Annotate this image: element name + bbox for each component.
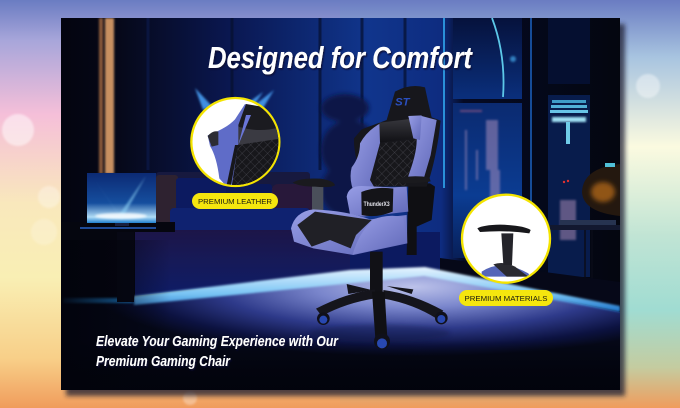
houseplant silhouette [322, 92, 372, 214]
desk and globe [550, 163, 620, 277]
arc light [492, 18, 504, 97]
callout: premium materials [459, 195, 553, 306]
neck pillow [379, 119, 412, 142]
poster drop shadow [66, 24, 625, 396]
right purple stripe [407, 116, 437, 180]
left armrest [293, 178, 335, 212]
title: Designed for Comfort [208, 40, 473, 75]
lumbar pillow [347, 186, 408, 217]
city windows [443, 18, 590, 277]
ceiling lamp [550, 100, 588, 144]
premium materials label: PREMIUM MATERIALS [464, 294, 548, 303]
vignette [140, 348, 620, 390]
desktop monitor [80, 173, 156, 229]
armrest detail circle [462, 195, 550, 283]
warm wooden light strips [98, 18, 116, 173]
right armrest [395, 176, 431, 183]
city lights [460, 110, 576, 240]
LED floor strip [64, 265, 620, 313]
wall panel lines [148, 18, 405, 170]
tagline line 2: Premium Gaming Chair [96, 354, 231, 370]
lumbar pillow: ThunderX3 [364, 201, 390, 208]
headrest logo: ST [395, 96, 411, 108]
chair base and casters [310, 252, 450, 349]
backrest [351, 86, 441, 195]
floor platform [135, 230, 350, 296]
gaming chair [291, 86, 450, 349]
callout: premium leather [191, 98, 282, 209]
tagline line 1: Elevate Your Gaming Experience with Our [96, 334, 339, 350]
back wall [61, 18, 620, 288]
quilted panel [375, 139, 416, 186]
left purple wing [350, 124, 380, 188]
leather detail circle [191, 98, 282, 187]
tagline [96, 334, 339, 370]
poster: gaming room scene [61, 18, 620, 390]
seat [291, 209, 407, 255]
right arm post [407, 183, 435, 255]
premium leather label: PREMIUM LEATHER [198, 197, 272, 206]
blue glow spikes behind detail circle [195, 88, 274, 110]
carpet lit floor [61, 270, 620, 390]
sofa [156, 172, 314, 230]
